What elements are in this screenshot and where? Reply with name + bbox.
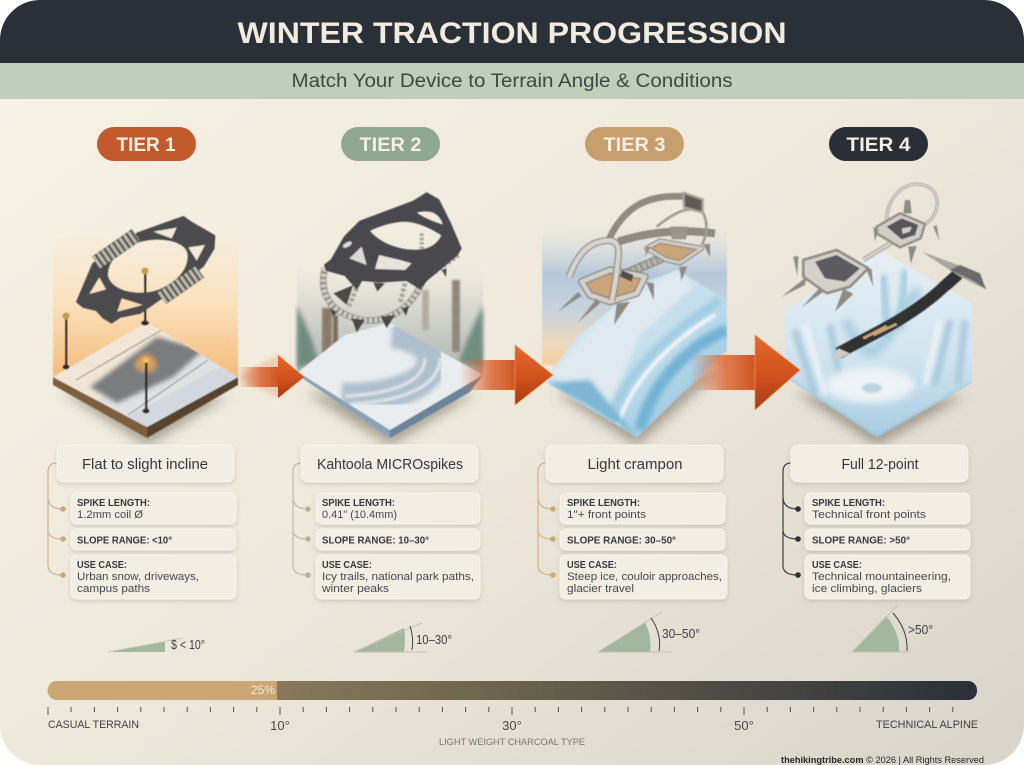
badge: tier 2 [341,127,440,161]
card: use case [71,555,236,599]
card: spike length: SPIKE LENGTH: [322,497,395,509]
card: use case: USE CASE: [322,559,372,571]
card: spike length [805,493,970,524]
scene: tier 4 alpine ice block [782,184,987,450]
icon: light crampon [558,193,715,325]
card: spike length: 1"+ front points [567,509,647,521]
slope diagram: 30 to 50 degrees [598,612,700,652]
card: spike length: SPIKE LENGTH: [567,497,640,509]
scale ticks [48,707,953,715]
scale labels: 50° [734,718,754,733]
card: spike length: SPIKE LENGTH: [812,497,885,509]
card: use case [805,555,970,599]
subtitle: Match Your Device to Terrain Angle & Conditions [292,71,732,92]
icon: coil traction device [77,217,214,322]
subtitle band [0,63,1024,99]
badge: tier 4: TIER 4 [846,135,911,156]
card: slope range [560,529,725,550]
card: slope range: SLOPE RANGE: <10° [77,534,172,546]
card: device name: Kahtoola MICROspikes [317,457,463,473]
card: slope range: SLOPE RANGE: >50° [812,534,910,546]
scale labels: 10° [270,718,290,733]
card: spike length [560,493,725,524]
card: device name [546,445,723,482]
card: spike length [71,493,236,524]
slope diagram: 10 to 30 degrees: 10–30° [416,632,452,647]
icon: full 12-point crampon [782,184,939,312]
icon: street lamps [62,268,154,414]
card: device name: Flat to slight incline [82,457,208,473]
icon: ice axe [832,252,987,358]
card: use case [560,555,727,599]
slope diagram: over 50 degrees [852,605,933,652]
card: use case: glacier travel [567,583,634,595]
card: device name [301,445,478,482]
card: device name [791,445,968,482]
slope diagram: 30 to 50 degrees: 30–50° [662,626,700,641]
card: slope range: SLOPE RANGE: 30–50° [567,534,676,546]
card: spike length [316,493,480,524]
scale labels: 30° [502,718,522,733]
progress value: 25% [251,683,275,697]
scale labels: LIGHT WEIGHT CHARCOAL TYPE [439,737,585,747]
card: slope range [805,529,970,550]
arrow: tier 2 to tier 3 [460,345,553,405]
card: use case: USE CASE: [812,559,862,571]
card: slope range: SLOPE RANGE: 10–30° [322,534,429,546]
card: spike length: 1.2mm coil Ø [77,509,143,521]
icon: spiked chain traction device [323,193,461,333]
card: spike length: Technical front points [812,509,927,521]
card: use case: Technical mountaineering, [812,571,951,583]
header band [0,0,1024,63]
scene: tier 2 forest trail [297,193,483,446]
card: use case: winter peaks [321,583,390,595]
badge: tier 1 [97,127,196,161]
panel: tier 2 details [293,445,480,599]
title: WINTER TRACTION PROGRESSION [238,17,786,50]
progress bar [48,681,977,700]
card: device name: Light crampon [588,457,682,473]
scale labels [48,718,978,747]
slope diagram: under 10 degrees: $ < 10° [171,637,205,652]
card: use case: Icy trails, national park paths, [322,571,474,583]
card: use case: ice climbing, glaciers [812,583,923,595]
badge: tier 4 [829,127,928,161]
card: slope range [316,529,480,550]
slope diagram: 10 to 30 degrees [354,623,452,652]
scale labels: CASUAL TERRAIN [48,719,139,731]
card: use case: Urban snow, driveways, [77,571,199,583]
card: use case: USE CASE: [567,559,617,571]
card: use case: Steep ice, couloir approaches, [567,571,722,583]
arrow: tier 1 to tier 2 [238,355,304,398]
trees [297,280,483,368]
card: use case: USE CASE: [77,559,127,571]
card: use case [316,555,480,599]
card: device name: Full 12-point [842,457,918,473]
card: device name [57,445,234,482]
card: spike length: 0.41" (10.4mm) [322,509,397,521]
card: spike length: SPIKE LENGTH: [77,497,150,509]
scene: tier 3 glacier slope [542,193,727,446]
scene: tier 1 urban pavement [53,217,238,446]
scale labels: TECHNICAL ALPINE [876,719,978,731]
card: use case: campus paths [77,583,151,595]
panel: tier 1 details [48,445,236,599]
panel: tier 3 details [538,445,727,599]
panel: tier 4 details [783,445,970,599]
badge: tier 1: TIER 1 [116,135,176,156]
tier badges [97,127,928,161]
slope diagram: over 50 degrees: >50° [908,622,933,637]
badge: tier 3 [585,127,684,161]
arrow: tier 3 to tier 4 [690,335,800,410]
slope diagram: under 10 degrees [108,637,205,652]
badge: tier 2: TIER 2 [360,135,422,156]
card: slope range [71,529,236,550]
badge: tier 3: TIER 3 [604,135,666,156]
